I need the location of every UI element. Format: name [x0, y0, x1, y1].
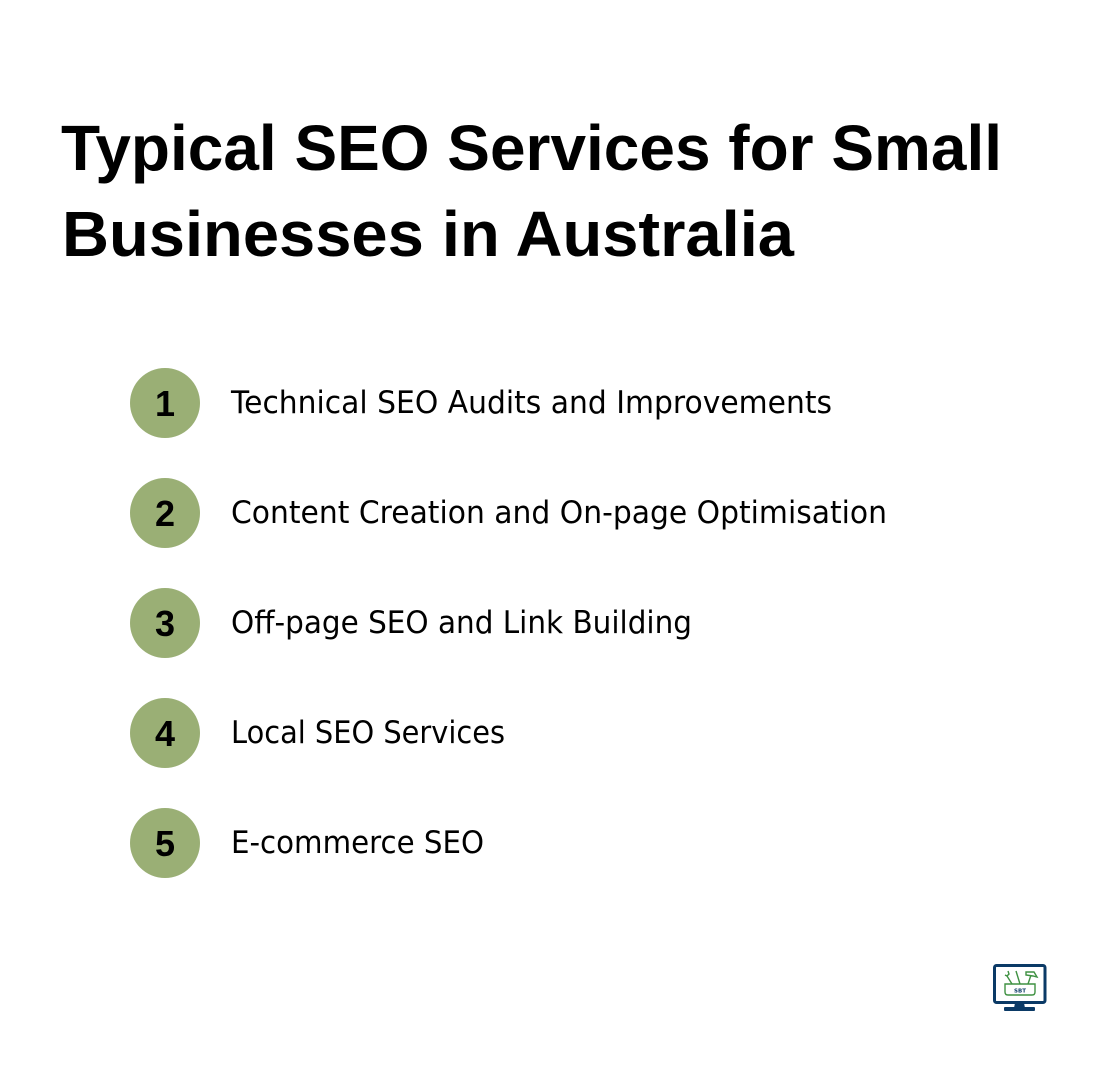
list item 2: Content Creation and On-page Optimisation	[231, 495, 887, 531]
list item 5: 5	[155, 823, 175, 864]
icon: SBT monitor logo with toolbox: SBT	[1014, 988, 1026, 994]
icon: SBT monitor logo with toolbox	[994, 966, 1045, 1011]
numbered list	[130, 368, 887, 878]
list item 4: 4	[155, 713, 175, 754]
list item 1	[130, 368, 832, 438]
list item 3: Off-page SEO and Link Building	[231, 605, 692, 641]
title: Businesses in Australia	[62, 198, 794, 270]
list item 2	[130, 478, 887, 548]
list item 5	[130, 808, 484, 878]
list item 5: E-commerce SEO	[231, 825, 484, 861]
list item 4: Local SEO Services	[231, 715, 505, 751]
title: Typical SEO Services for Small	[61, 112, 1002, 184]
list item 3	[130, 588, 692, 658]
list item 1: Technical SEO Audits and Improvements	[230, 385, 832, 421]
title	[61, 112, 1002, 270]
list item 4	[130, 698, 505, 768]
list item 1: 1	[155, 383, 175, 424]
list item 2: 2	[155, 493, 175, 534]
list item 3: 3	[155, 603, 175, 644]
